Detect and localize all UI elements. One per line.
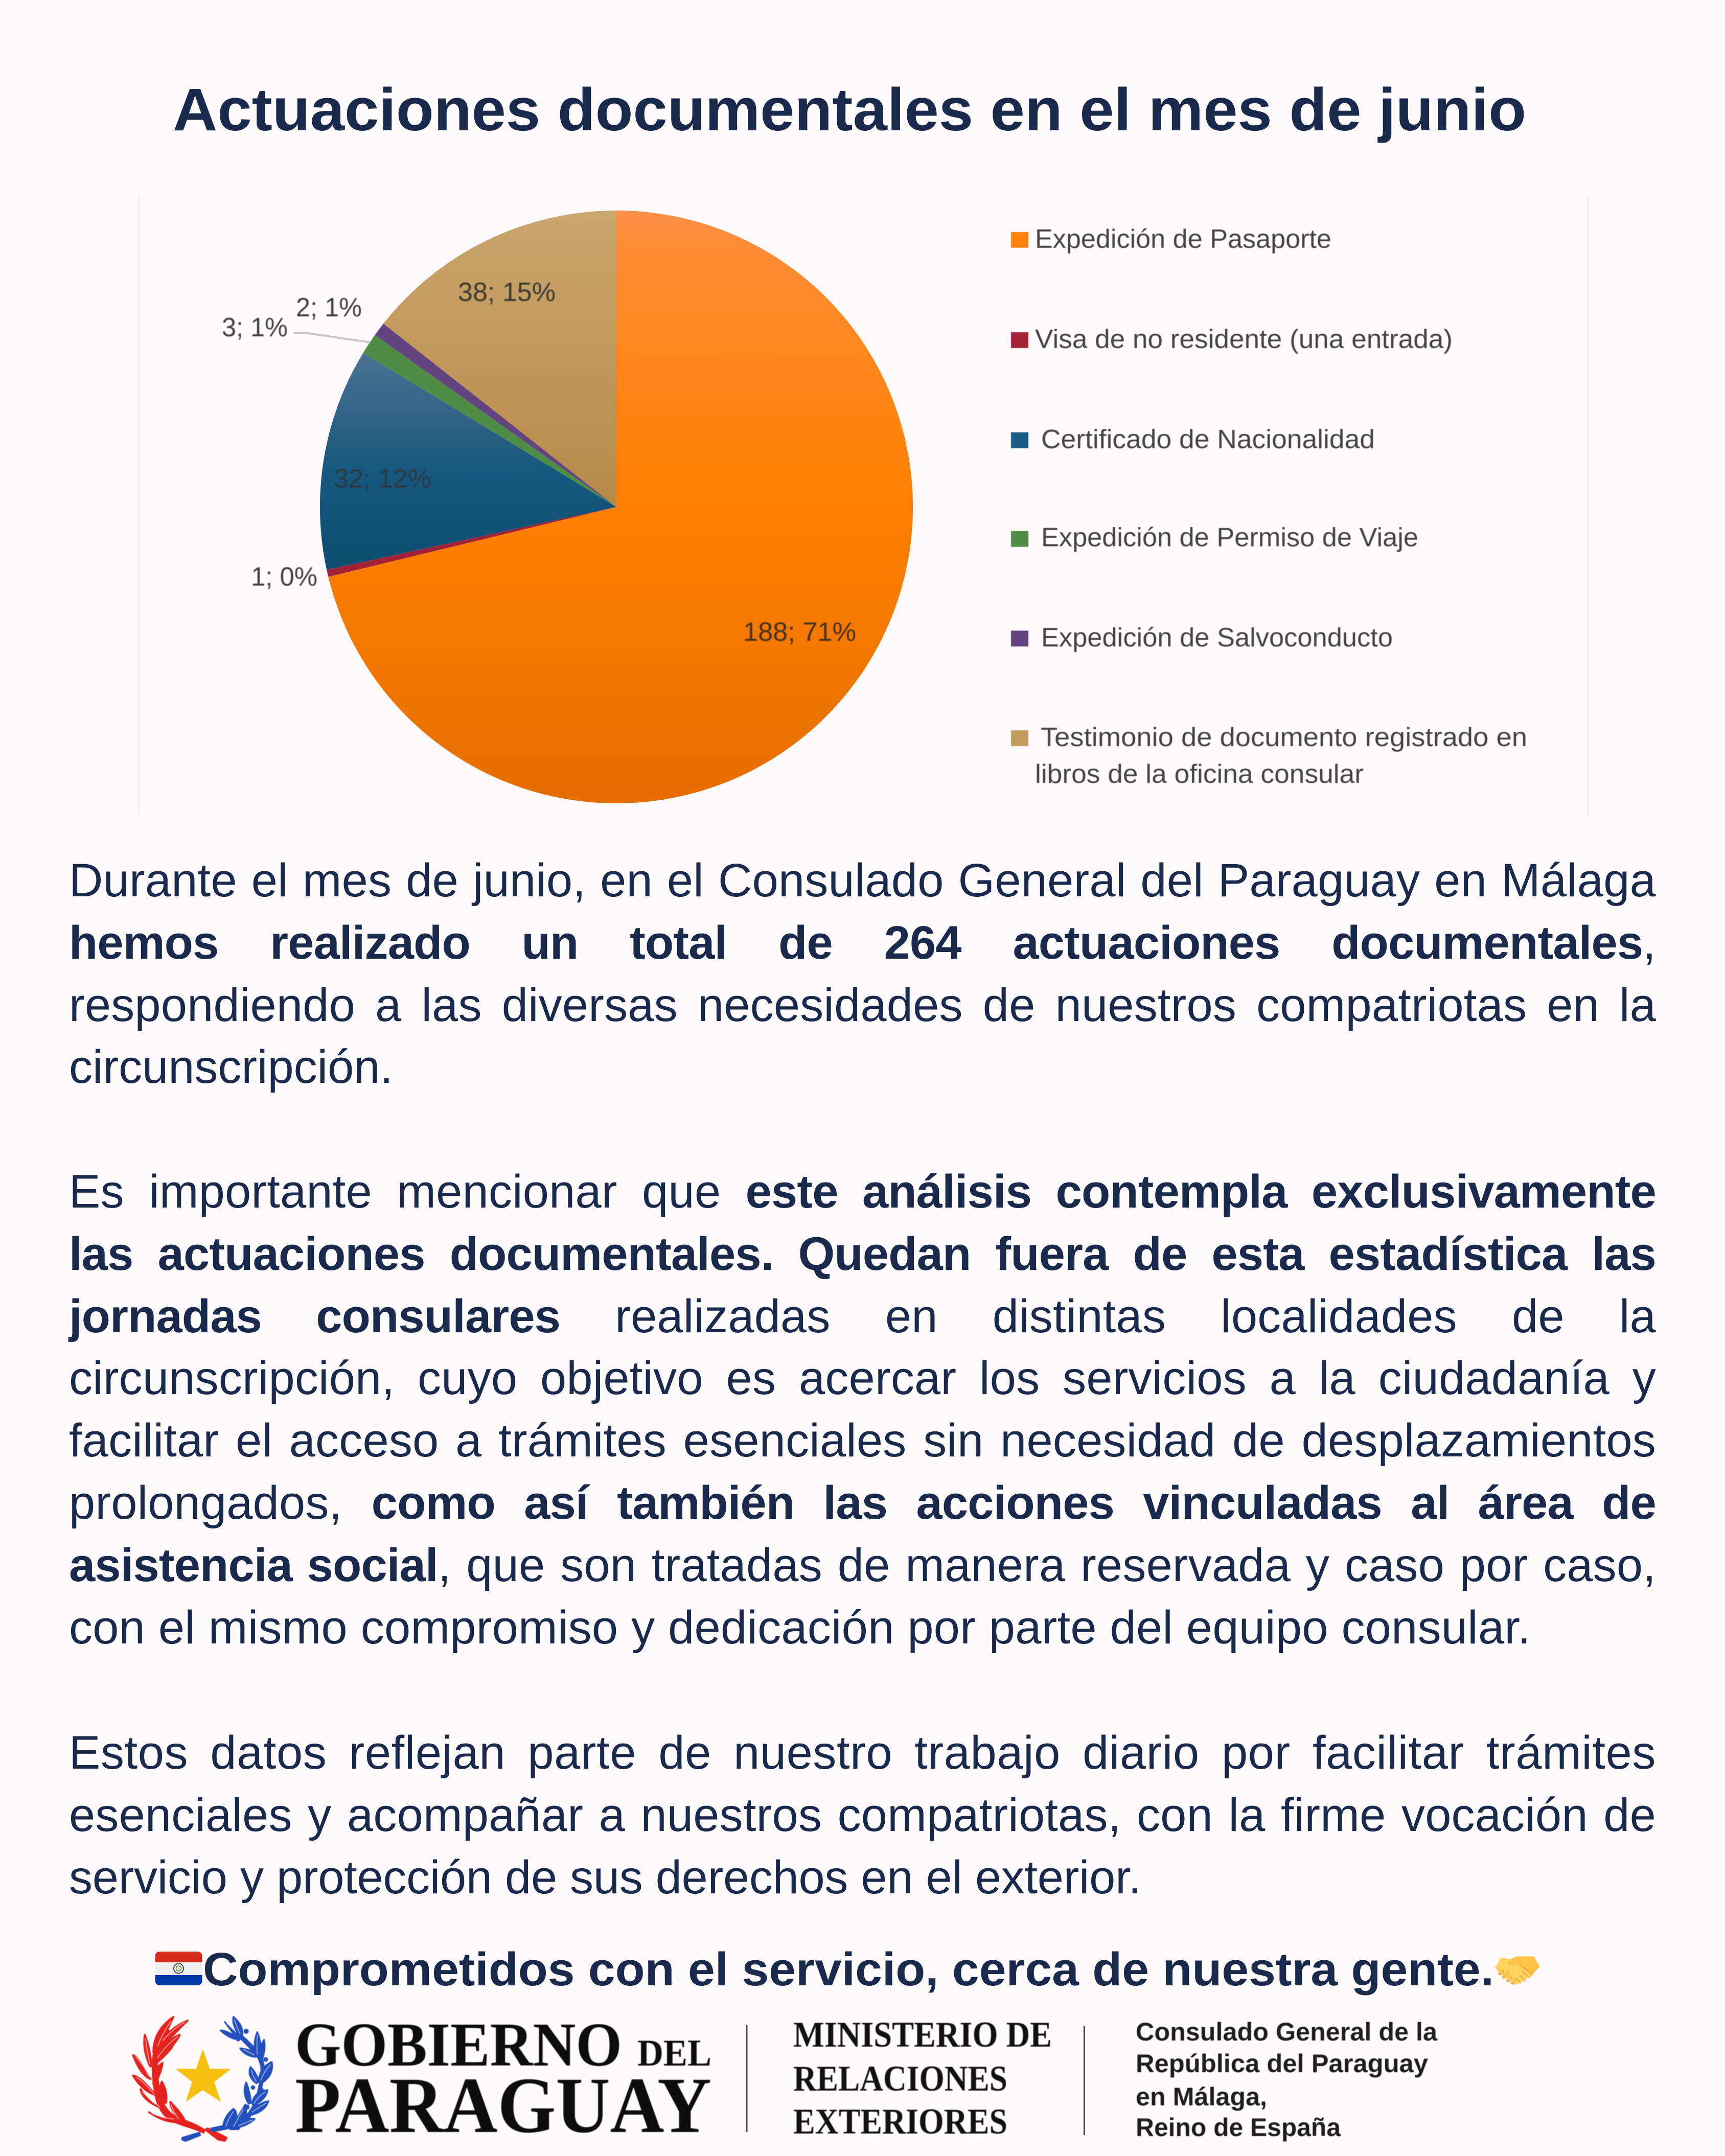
blue branch: [182, 2017, 272, 2141]
leader line: [293, 333, 370, 342]
wedge: Expedición de Pasaporte: [328, 211, 913, 803]
paragraph 2: Es importante mencionar que este análisis contempla exclusivamente: [69, 1166, 1656, 1218]
logo: Ministerio de Relaciones Exteriores: [793, 2015, 1052, 2142]
legend: Testimonio de documento registrado en: [1041, 723, 1527, 752]
paragraph 2: circunscripción, cuyo objetivo es acercar los servicios a la ciudadanía y: [69, 1352, 1656, 1404]
wedge: Certificado de Nacionalidad: [320, 353, 616, 570]
pie chart: [320, 211, 913, 803]
logo: Ministerio de Relaciones Exteriores: MINISTERIO DE: [793, 2015, 1052, 2055]
paragraph 1: Durante el mes de junio, en el Consulado General del Paraguay en Málaga: [69, 854, 1656, 907]
paragraph 2: con el mismo compromiso y dedicación por parte del equipo consular.: [69, 1602, 1531, 1654]
panel: pie chart with legend: [138, 195, 1589, 816]
data labels: [222, 277, 856, 647]
legend: Expedición de Salvoconducto: [1041, 623, 1393, 653]
gold star: [175, 2049, 231, 2102]
blue branch veins: [226, 2020, 270, 2127]
paragraph 3: servicio y protección de sus derechos en el exterior.: [69, 1851, 1141, 1904]
paragraph 2: prolongados, como así también las acciones vinculadas al área de: [69, 1477, 1656, 1529]
title: Actuaciones documentales en el mes de junio: [173, 76, 1526, 144]
paragraph 1: [69, 854, 1656, 1093]
consulate name: [1136, 2018, 1438, 2142]
legend: Visa de no residente (una entrada): [1035, 324, 1453, 354]
data labels: 38; 15%: [458, 277, 556, 307]
slogan text: Comprometidos con el servicio, cerca de nuestra gente.: [203, 1943, 1494, 1996]
wedge: Testimonio de documento: [383, 211, 616, 507]
icon: handshake: [1495, 1956, 1540, 1985]
legend: [1011, 224, 1527, 789]
logo: Ministerio de Relaciones Exteriores: EXTERIORES: [793, 2102, 1007, 2142]
paragraph 2: las actuaciones documentales. Quedan fuera de esta estadística las: [69, 1228, 1656, 1280]
paragraph 2: facilitar el acceso a trámites esenciales sin necesidad de desplazamientos: [69, 1415, 1656, 1467]
legend: Expedición de Pasaporte: [1035, 224, 1331, 254]
consulate name: República del Paraguay: [1136, 2049, 1428, 2078]
paragraph 2: jornadas consulares realizadas en distintas localidades de la: [69, 1290, 1656, 1342]
legend: libros de la oficina consular: [1035, 759, 1364, 789]
paragraph 2: asistencia social, que son tratadas de manera reservada y caso por caso,: [69, 1539, 1656, 1591]
consulate name: Reino de España: [1136, 2113, 1341, 2142]
logo: Gobierno del Paraguay: [133, 2010, 711, 2149]
wordmark: GOBIERNO: [295, 2010, 622, 2079]
data labels: 1; 0%: [251, 562, 317, 592]
logo: Ministerio de Relaciones Exteriores: RELACIONES: [793, 2059, 1007, 2099]
wedge: Expedición de Salvoconducto: [375, 323, 616, 507]
data labels: 2; 1%: [296, 293, 362, 322]
data labels: 32; 12%: [334, 464, 431, 494]
wordmark: [295, 2010, 711, 2149]
paragraph 1: respondiendo a las diversas necesidades de nuestros compatriotas en la: [69, 979, 1656, 1031]
data labels: 188; 71%: [743, 617, 856, 647]
icon: Paraguay flag: [155, 1952, 202, 1985]
slogan line: [155, 1943, 1540, 1996]
red branch: [133, 2017, 226, 2141]
paragraph 1: hemos realizado un total de 264 actuaciones documentales,: [69, 917, 1656, 969]
paragraph 1: circunscripción.: [69, 1041, 393, 1093]
paragraph 3: esenciales y acompañar a nuestros compatriotas, con la firme vocación de: [69, 1789, 1656, 1841]
consulate name: Consulado General de la: [1136, 2018, 1438, 2046]
paragraph 3: Estos datos reflejan parte de nuestro trabajo diario por facilitar trámites: [69, 1727, 1656, 1779]
consulate name: en Málaga,: [1136, 2082, 1267, 2111]
paragraph 3: [69, 1727, 1656, 1904]
paragraph 2: [68, 1166, 1656, 1654]
emblem: laurel wreath and star: [133, 2017, 272, 2141]
wedge: Expedición de Permiso de Viaje: [363, 335, 616, 507]
legend: Expedición de Permiso de Viaje: [1041, 523, 1418, 552]
data labels: 3; 1%: [222, 313, 288, 342]
wedge: Visa de no residente: [327, 507, 616, 577]
wordmark: DEL: [637, 2032, 711, 2074]
legend: Certificado de Nacionalidad: [1041, 425, 1375, 454]
red branch veins: [135, 2021, 185, 2119]
wordmark: PARAGUAY: [295, 2061, 711, 2149]
